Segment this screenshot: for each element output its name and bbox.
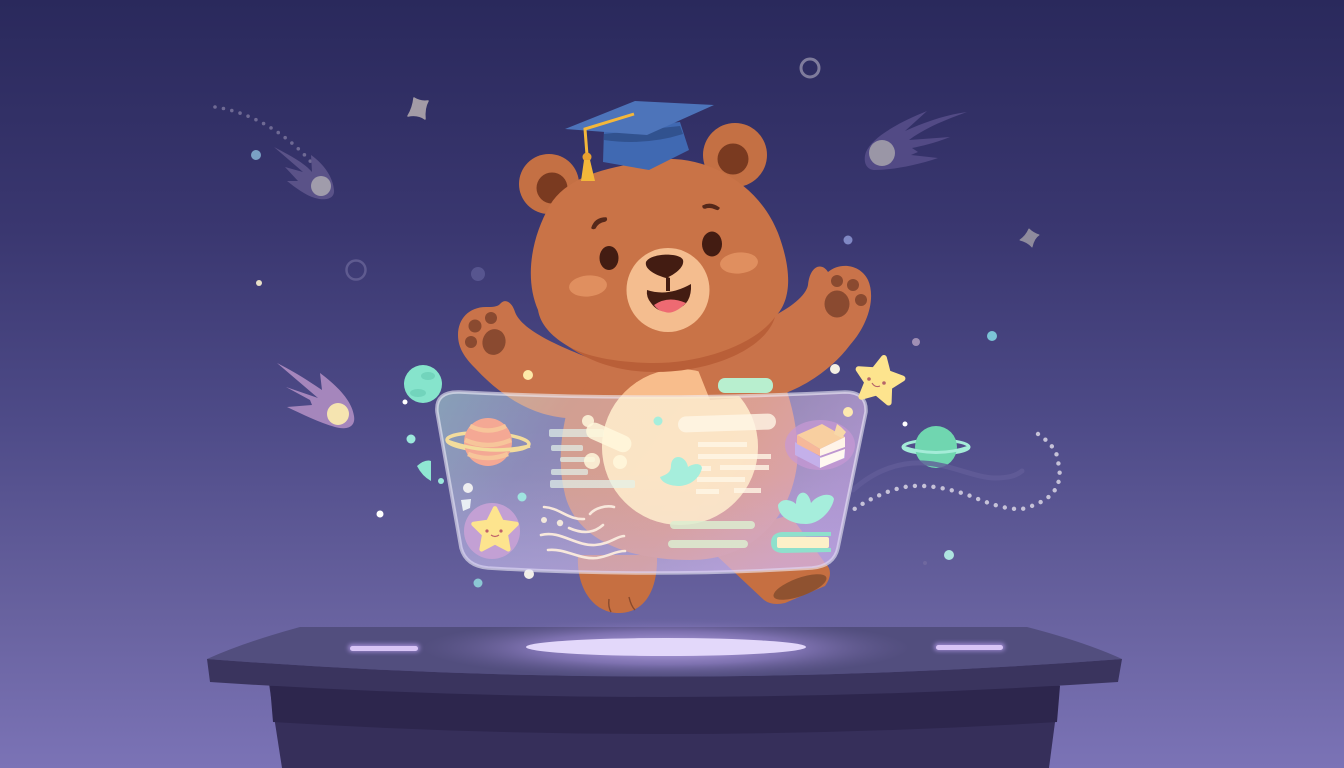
sparkle in panel	[461, 499, 471, 511]
right paw pads	[824, 275, 867, 318]
left eye	[600, 246, 618, 270]
green label pill	[718, 378, 773, 393]
right foot sole	[771, 569, 829, 605]
torso	[561, 350, 798, 560]
graduation cap	[565, 101, 714, 181]
lower green lines	[668, 521, 755, 548]
ringed planet	[447, 418, 530, 466]
teal cloud right	[778, 493, 834, 524]
panel small dots	[463, 407, 853, 526]
right text lines	[678, 413, 776, 494]
belly	[602, 369, 758, 525]
left eyebrow	[592, 218, 606, 228]
glow pool	[421, 618, 911, 678]
tassel cord	[585, 114, 634, 155]
ring top	[801, 59, 819, 77]
top floating dots	[523, 364, 840, 380]
glowing capsule	[582, 415, 634, 469]
left paw pads	[465, 312, 508, 358]
teal leaf fragment	[417, 461, 431, 481]
cap base	[603, 122, 689, 170]
right eye	[702, 232, 722, 256]
nose	[646, 255, 683, 278]
left cheek	[568, 274, 608, 298]
dotted trail right	[853, 434, 1060, 510]
comet lower left	[277, 363, 354, 428]
cap under shadow	[604, 126, 683, 142]
panel glass	[437, 392, 866, 573]
ring left	[346, 260, 366, 280]
dotted trail top left	[215, 107, 311, 162]
right indicator glow	[934, 643, 1005, 651]
book icon	[771, 532, 831, 553]
ringed green planet right	[903, 426, 969, 468]
muzzle	[626, 248, 710, 332]
floating dots	[251, 150, 997, 588]
wavy lines	[541, 506, 625, 558]
bear	[458, 101, 871, 613]
holographic glass panel	[437, 369, 866, 573]
teal cloud centre	[660, 457, 702, 486]
mouth	[647, 276, 691, 313]
smiling star	[853, 353, 906, 404]
wave trail right	[853, 463, 1022, 490]
podium top surface	[207, 627, 1122, 676]
comet top left	[274, 147, 334, 199]
right indicator light	[936, 645, 1003, 650]
podium lip	[207, 659, 1122, 697]
left text lines	[549, 429, 635, 488]
green planet left	[404, 365, 442, 403]
right ear	[703, 123, 767, 187]
right leg	[700, 515, 830, 604]
star badge	[464, 503, 520, 559]
pedestal	[269, 684, 1060, 768]
comet top right	[865, 111, 967, 170]
head	[531, 159, 788, 363]
left indicator light	[350, 646, 418, 651]
tassel	[581, 160, 595, 181]
right cheek	[719, 251, 759, 275]
podium	[207, 618, 1122, 768]
left ear	[519, 154, 579, 214]
collar shadow	[560, 310, 775, 372]
left arm	[458, 301, 600, 418]
sparkle star right	[1020, 229, 1039, 247]
cap board	[565, 101, 714, 135]
left toe marks	[609, 597, 635, 612]
sparkle star left	[408, 98, 428, 119]
right eyebrow	[703, 204, 719, 209]
panel lower tint	[437, 392, 866, 573]
tassel knot	[582, 152, 592, 162]
left leg	[578, 555, 657, 613]
central light disc	[526, 638, 806, 656]
pedestal shadow band	[270, 686, 1060, 734]
right arm	[690, 266, 871, 400]
glowing belly	[602, 396, 758, 524]
book stack icon	[785, 420, 855, 470]
left indicator glow	[348, 644, 420, 652]
